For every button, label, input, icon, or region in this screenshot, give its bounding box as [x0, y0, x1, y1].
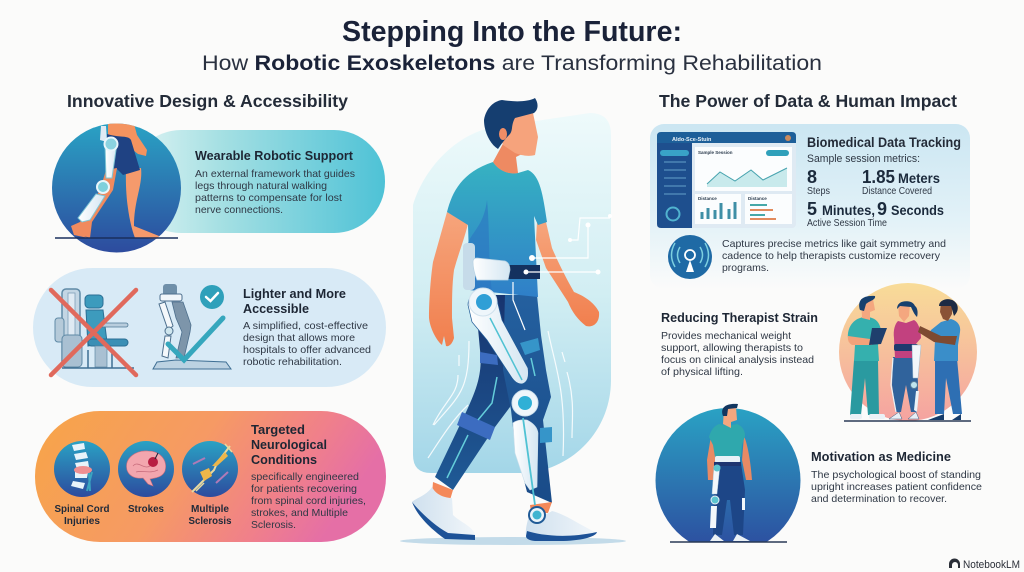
text: lighter and more accessible: Lighter and More — [243, 287, 346, 301]
labels: condition names — [54, 504, 232, 527]
icon: brain stroke — [118, 441, 174, 497]
metric: active session time: Minutes, — [822, 202, 875, 218]
labels: condition names: Multiple — [191, 504, 229, 515]
hair — [484, 98, 538, 149]
panel: biomedical data tracking — [650, 124, 970, 289]
illustration: therapists with patient — [839, 283, 977, 421]
text: motivation as medicine: Motivation as Medicine — [811, 450, 951, 464]
text: targeted neurological conditions: Conditions — [251, 453, 317, 467]
metric: steps — [807, 167, 830, 197]
text: reducing therapist strain: Reducing Therapist Strain — [661, 311, 818, 325]
metric: active session time: Active Session Time — [807, 217, 887, 229]
left arm — [429, 212, 468, 346]
hip pack — [473, 258, 510, 280]
therapist in blue — [918, 299, 962, 420]
text: reducing therapist strain: Provides mechanical weight — [661, 330, 791, 342]
dashboard mockup — [657, 132, 796, 228]
shin plate — [513, 420, 538, 490]
text: targeted neurological conditions: Neurological — [251, 438, 327, 452]
text: wearable robotic support: nerve connections. — [195, 204, 283, 216]
metric: distance — [862, 167, 940, 197]
text: lighter and more accessible: robotic rehabilitation. — [243, 356, 342, 368]
back leg — [435, 295, 520, 490]
labels: condition names: Spinal Cord — [54, 504, 110, 515]
icon: spinal cord — [54, 441, 110, 497]
text: targeted neurological conditions: from spinal cord injuries, — [251, 495, 366, 507]
icon: exoskeleton leg — [52, 120, 181, 252]
ground shadow — [400, 537, 626, 545]
text: reducing therapist strain: focus on clinical analysis instead — [661, 354, 814, 366]
text: targeted neurological conditions: Sclerosis. — [251, 519, 296, 531]
legs — [713, 463, 745, 535]
text: reducing therapist strain: of physical lifting. — [661, 366, 743, 378]
dashboard mockup: Sample Session — [698, 150, 733, 155]
heading: right column: The Power of Data & Human Impact — [659, 91, 957, 111]
labels: condition names: Injuries — [64, 516, 100, 527]
shirt — [447, 162, 547, 297]
front shoe — [526, 511, 597, 538]
central figure: walking man with exoskeleton — [400, 98, 626, 545]
metric: distance: Distance Covered — [862, 185, 932, 197]
text: motivation as medicine: The psychological boost of standing — [811, 469, 981, 481]
arms — [707, 436, 752, 480]
dashboard mockup: Distance — [748, 196, 767, 201]
motion lines — [428, 331, 573, 458]
text: lighter and more accessible: A simplified, cost-effective — [243, 320, 368, 332]
text: lighter and more accessible: design that allows more — [243, 332, 355, 344]
hip joint — [469, 288, 497, 316]
text: sample session intro: Sample session metrics: — [807, 153, 920, 165]
icon: crossed-out bulky machine — [51, 289, 136, 375]
icon: sensor signal — [668, 235, 712, 279]
text: wearable robotic support — [195, 149, 355, 216]
labels: condition names: Sclerosis — [188, 516, 232, 527]
metric: steps: Steps — [807, 185, 830, 197]
back pack — [463, 243, 475, 290]
text: wearable robotic support: Wearable Robotic Support — [195, 149, 354, 163]
heading: left column: Innovative Design & Accessibility — [67, 91, 348, 111]
text: captures metrics: programs. — [722, 262, 769, 274]
text: lighter and more accessible — [243, 287, 371, 368]
knee joint — [512, 390, 538, 416]
front leg — [503, 295, 552, 503]
illustration: patient standing upright — [656, 404, 800, 553]
text: captures metrics — [722, 238, 946, 274]
icon: nerve damage — [182, 441, 238, 497]
text: captures metrics: cadence to help therapists customize recovery — [722, 250, 941, 262]
patient in exoskeleton — [889, 301, 921, 419]
thigh plate — [468, 291, 528, 384]
right arm — [536, 222, 599, 326]
dashboard mockup: Aldo-Sce-Stuin — [672, 137, 712, 143]
panel: wearable robotic support — [52, 120, 385, 252]
metric: distance: 1.85 — [862, 167, 895, 187]
belt — [505, 265, 540, 279]
text: lighter and more accessible: Accessible — [243, 302, 309, 316]
text: targeted neurological conditions — [251, 423, 366, 531]
text: motivation as medicine: and determination to recover. — [811, 493, 947, 505]
icon: light exoskeleton with check — [153, 284, 231, 369]
ankles — [432, 482, 552, 513]
text: reducing therapist strain — [661, 311, 818, 378]
text: wearable robotic support: legs through natural walking — [195, 180, 327, 192]
neck and head — [493, 140, 530, 173]
text: motivation as medicine — [811, 450, 982, 505]
text: biomedical heading: Biomedical Data Tracking — [807, 134, 961, 150]
metric: active session time: 9 — [877, 199, 887, 219]
leg straps — [457, 352, 498, 440]
panel: lighter and more accessible — [33, 268, 386, 387]
metric: steps: 8 — [807, 167, 817, 187]
torso — [709, 424, 745, 457]
metric: distance: Meters — [898, 170, 940, 186]
text: targeted neurological conditions: Targeted — [251, 423, 305, 437]
labels: condition names: Strokes — [128, 504, 164, 515]
text: targeted neurological conditions: strokes, and Multiple — [251, 507, 348, 519]
backdrop — [413, 113, 611, 473]
text: lighter and more accessible: hospitals to offer advanced — [243, 344, 371, 356]
text: wearable robotic support: patterns to compensate for lost — [195, 192, 342, 204]
metric: active session time: Seconds — [891, 202, 944, 218]
metric: active session time — [807, 199, 944, 229]
title: Stepping Into the Future: — [342, 16, 682, 48]
ankle joint — [528, 506, 546, 524]
sensor nodes — [524, 214, 612, 274]
text: captures metrics: Captures precise metrics like gait symmetry and — [722, 238, 946, 250]
dashboard mockup: Distance — [698, 196, 717, 201]
subtitle: How Robotic Exoskeletons are Transforming Rehabilitation — [202, 51, 822, 75]
text: targeted neurological conditions: specifically engineered — [251, 471, 359, 483]
therapist with tablet — [848, 296, 887, 419]
text: wearable robotic support: An external framework that guides — [195, 168, 355, 180]
metric: active session time: 5 — [807, 199, 817, 219]
text: reducing therapist strain: support, allowing therapists to — [661, 342, 803, 354]
circuit lines — [513, 218, 610, 330]
panel: targeted neurological conditions — [35, 411, 386, 542]
text: targeted neurological conditions: for patients recovering — [251, 483, 357, 495]
logo: NotebookLM: NotebookLM — [963, 559, 1020, 571]
rear shoe — [412, 487, 475, 540]
text: motivation as medicine: upright increases patient confidence — [811, 481, 982, 493]
